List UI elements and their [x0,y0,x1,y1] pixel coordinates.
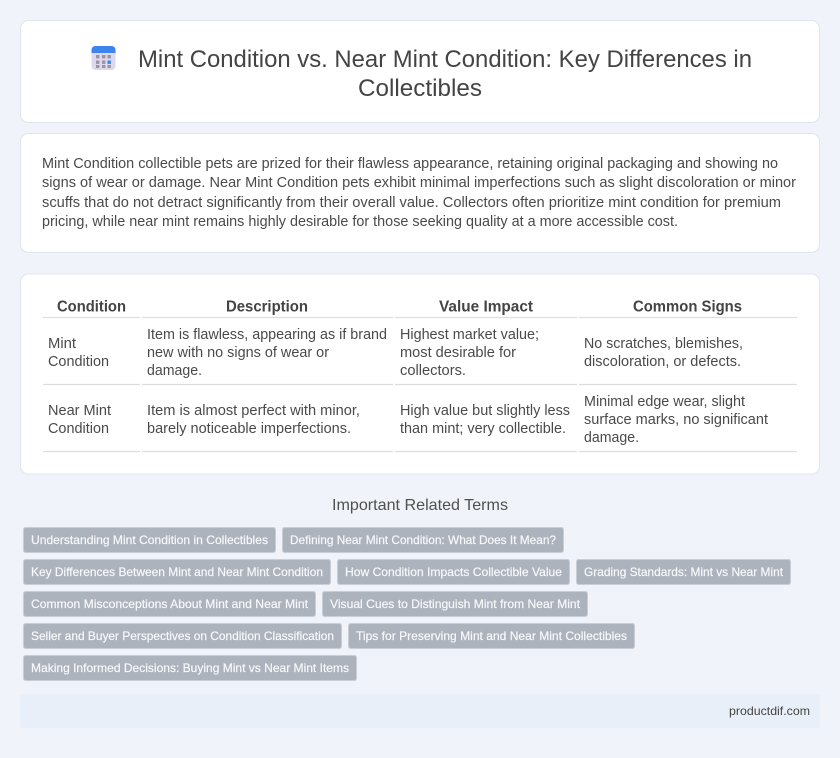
table row: mint condition: most desirable for [400,345,516,361]
table row: mint condition: damage. [147,363,202,379]
table row: mint condition: Condition [48,354,109,370]
related term chips: Defining Near Mint Condition: What Does It Mean? [290,533,556,547]
table row: near mint condition: Condition [48,421,109,437]
table row: near mint condition: Near Mint [48,403,111,419]
related term chips: Tips for Preserving Mint and Near Mint Collectibles [356,629,627,643]
table row: mint condition: collectors. [400,363,466,379]
intro paragraph: scuffs that do not detract significantly from their overall value. Collectors often prioritize mint condition for premium [42,195,781,211]
header panel [20,20,820,122]
related term chips: Common Misconceptions About Mint and Near Mint [31,597,309,611]
related term chips [24,528,790,680]
footer [20,694,820,728]
title: Collectibles [358,75,482,102]
table row: near mint condition: barely noticeable imperfections. [147,421,351,437]
panel: introduction [20,134,820,252]
related term chips: Understanding Mint Condition in Collectibles [31,533,268,547]
table row: near mint condition: Item is almost perfect with minor, [147,403,360,419]
related term chips: How Condition Impacts Collectible Value [345,565,562,579]
table header: Common Signs [633,298,742,316]
title [138,46,752,102]
intro paragraph: pricing, while near mint remains highly desirable for those seeking quality at a more accessible cost. [42,214,678,230]
icon: calendar [92,46,116,70]
related term chips: Key Differences Between Mint and Near Mint Condition [31,565,323,579]
table header: Condition [57,298,126,316]
intro paragraph [42,156,796,230]
table row: mint condition: discoloration, or defects. [584,354,741,370]
table row: mint condition: No scratches, blemishes, [584,336,743,352]
table row: mint condition: Mint [48,336,76,352]
footer: productdif.com [729,704,810,718]
table row: mint condition: Item is flawless, appearing as if brand [147,327,387,343]
related term chips: Grading Standards: Mint vs Near Mint [584,565,784,579]
table row: near mint condition [48,394,768,446]
related term chips: Visual Cues to Distinguish Mint from Near Mint [330,597,581,611]
table row: near mint condition: than mint; very collectible. [400,421,566,437]
related term chips: Making Informed Decisions: Buying Mint vs Near Mint Items [31,661,349,675]
heading: important related terms: Important Related Terms [332,497,508,514]
panel: comparison table [20,274,820,474]
table row: near mint condition: High value but slightly less [400,403,570,419]
intro paragraph: Mint Condition collectible pets are prized for their flawless appearance, retaining original packaging and showing no [42,156,778,172]
table row: mint condition [48,327,743,379]
table header: Value Impact [439,298,534,316]
table row: mint condition: new with no signs of wear or [147,345,329,361]
intro paragraph: signs of wear or damage. Near Mint Condition pets exhibit minimal imperfections such as slight discoloration or minor [42,175,796,191]
table row: near mint condition: damage. [584,430,639,446]
table row: near mint condition: surface marks, no significant [584,412,768,428]
table row: mint condition: Highest market value; [400,327,539,343]
title: Mint Condition vs. Near Mint Condition: Key Differences in [138,46,752,73]
table row: near mint condition: Minimal edge wear, slight [584,394,745,410]
related term chips: Seller and Buyer Perspectives on Condition Classification [31,629,334,643]
table header: Description [226,298,308,316]
table header [57,298,742,316]
